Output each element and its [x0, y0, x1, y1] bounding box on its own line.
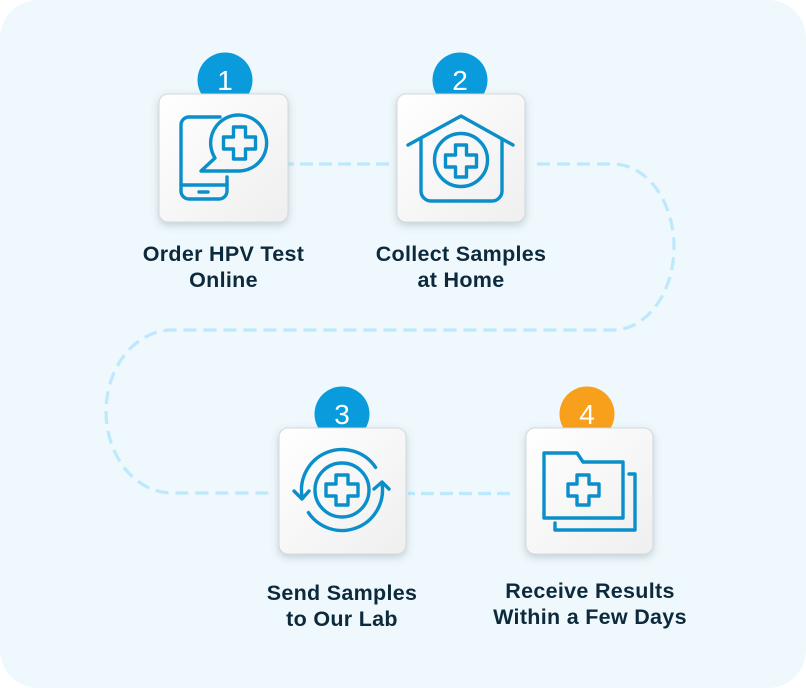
card 2 — [397, 94, 525, 222]
number badge 4 — [560, 386, 614, 442]
dashed connector path — [106, 164, 674, 494]
number badge 2: 2 — [452, 65, 468, 96]
card 4 — [526, 428, 653, 554]
step 4 — [493, 386, 687, 629]
label 2: Collect Samples — [376, 242, 546, 266]
label 1: Order HPV Test — [143, 242, 304, 266]
number badge 4: 4 — [579, 399, 595, 430]
step 2 — [376, 52, 546, 292]
icon: house with medical cross — [408, 116, 513, 201]
label 4: Within a Few Days — [493, 605, 687, 629]
number badge 3 — [314, 386, 370, 442]
label 1: Online — [189, 268, 258, 292]
card 1 — [159, 94, 288, 222]
label 2: at Home — [418, 268, 504, 292]
icon: medical folder — [544, 453, 635, 530]
number badge 2 — [432, 52, 488, 108]
number badge 1: 1 — [217, 65, 233, 96]
icon: circular arrows with medical cross — [294, 449, 389, 531]
label 3: Send Samples — [267, 581, 417, 605]
icon: phone with medical chat bubble — [181, 115, 267, 199]
card 3 — [279, 428, 406, 554]
step 3 — [267, 386, 417, 631]
number badge 3: 3 — [334, 399, 350, 430]
label 3: to Our Lab — [286, 607, 398, 631]
step 1 — [143, 52, 304, 292]
label 4: Receive Results — [505, 579, 675, 603]
number badge 1 — [198, 52, 252, 108]
